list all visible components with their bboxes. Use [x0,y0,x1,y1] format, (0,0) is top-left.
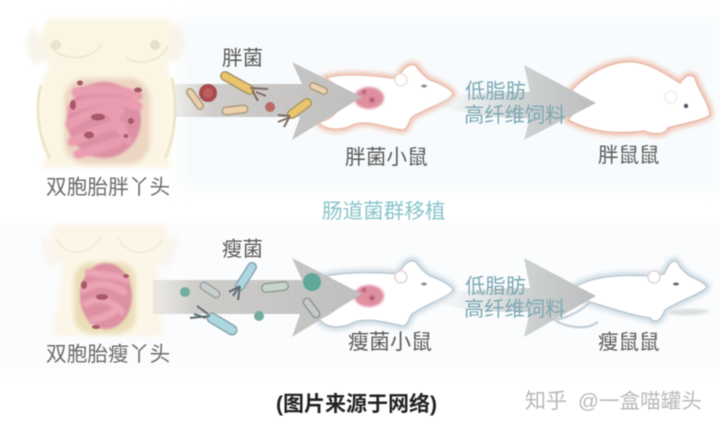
label: plump twin: 双胞胎胖丫头 [46,176,170,199]
illustration: plump twin torso [27,18,185,168]
heading: top donor label: 胖菌 [222,47,263,70]
label: lean mouse: 瘦鼠鼠 [598,331,660,354]
arrow: slim bacteria transfer [153,258,362,337]
mouse: slim bacteria mouse [318,261,453,327]
mouse: lean mouse [553,261,710,327]
arrow: plump bacteria transfer [175,62,362,140]
torso details: plump twin [38,40,175,158]
mouse gut: slim [354,285,384,307]
label: bottom donor: 瘦菌 [222,238,263,261]
caption: image source: (图片来源于网络) [276,392,437,416]
watermark: @一盒喵罐头 [578,390,702,413]
illustration: slim twin torso [42,224,176,336]
label: bottom diet: 高纤维饲料 [464,298,565,321]
bacteria: slim group [180,267,321,330]
label: bottom diet: 低脂肪 [465,275,526,298]
illustration: slim intestines [74,262,136,334]
label: plump bacteria mouse: 胖菌小鼠 [345,146,428,169]
label: fat mouse: 胖鼠鼠 [598,144,660,167]
mouse: plump bacteria mouse [318,65,453,130]
label: top diet: 低脂肪 [465,80,526,103]
label: slim bacteria mouse: 瘦菌小鼠 [348,331,432,354]
label: top diet: 高纤维饲料 [464,104,565,127]
arrow: top diet [430,65,596,140]
mouse gut: plump [354,87,384,109]
torso details: slim twin [56,236,162,253]
bacteria: plump group [190,76,324,127]
mouse: fat mouse [568,62,710,134]
label: slim twin: 双胞胎瘦丫头 [46,343,170,366]
heading: microbiota transplant: 肠道菌群移植 [322,200,446,223]
arrow: bottom diet [430,258,596,337]
watermark: 知乎 [525,390,567,413]
illustration: plump intestines [64,78,150,164]
